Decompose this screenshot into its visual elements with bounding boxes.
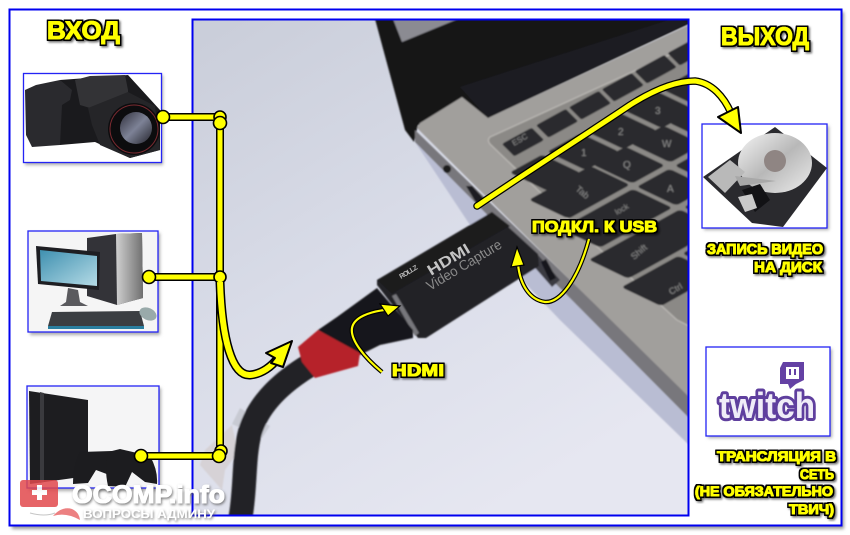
keyboard well — [488, 46, 689, 326]
icon: camera — [25, 75, 160, 158]
panel: hard drive — [702, 124, 829, 230]
function keys — [502, 41, 688, 156]
panel: camera — [24, 74, 163, 165]
watermark: OCOMP.info — [72, 481, 225, 509]
usb port — [530, 255, 560, 287]
red collar — [298, 330, 360, 378]
watermark — [20, 480, 225, 521]
caption: streaming: (НЕ ОБЯЗАТЕЛЬНО — [695, 483, 833, 499]
panel: computer — [28, 231, 160, 335]
heading: output: ВЫХОД — [721, 23, 809, 51]
hinge — [460, 19, 689, 118]
arrow: to capture cable — [220, 282, 292, 375]
screen display corner — [393, 19, 458, 42]
panel: central photo — [192, 18, 690, 516]
caption: record video to disk: ЗАПИСЬ ВИДЕО — [707, 241, 823, 258]
dongle text: HDMI — [424, 241, 473, 279]
icon: twitch bubble — [780, 362, 804, 389]
caption: streaming: СЕТЬ — [800, 466, 834, 482]
shadow under laptop — [415, 142, 689, 445]
label: hdmi: HDMI — [392, 361, 444, 380]
dongle text: Video Capture — [423, 236, 505, 294]
icon: gamepads — [73, 449, 157, 487]
icon: computer — [36, 233, 159, 329]
hdmi plug — [318, 288, 413, 355]
panel: game console — [27, 386, 161, 491]
caption: streaming: ТВИЧ) — [789, 501, 834, 517]
key labels: 2 — [618, 127, 624, 138]
laptop base top — [417, 25, 689, 397]
key labels: lock — [614, 201, 631, 217]
label: usb connection: ПОДКЛ. К USB — [532, 219, 657, 236]
icon: console — [29, 391, 88, 484]
heading: input: ВХОД — [47, 17, 120, 45]
cable — [240, 365, 310, 520]
laptop base side — [415, 130, 689, 418]
arrow: to hard drive — [477, 81, 741, 206]
keyboard keys — [511, 74, 688, 306]
capture dongle — [377, 212, 539, 338]
caption: streaming: ТРАНСЛЯЦИЯ В — [717, 448, 836, 464]
key labels: Tab — [574, 184, 591, 201]
tie — [200, 425, 238, 490]
arrow: usb — [511, 239, 589, 302]
icon: hdd — [703, 127, 827, 227]
key labels: 3 — [655, 106, 661, 117]
icon: first aid case — [20, 480, 80, 520]
key labels — [510, 106, 684, 297]
caption: record video to disk — [707, 241, 823, 276]
watermark: ВОПРОСЫ АДМИНУ — [83, 507, 216, 521]
key labels: Ctrl — [667, 281, 684, 297]
dongle text: ROLLZ — [398, 264, 420, 281]
key labels: Q — [623, 160, 631, 171]
caption: record video to disk: НА ДИСК — [754, 259, 823, 276]
key labels: ESC — [510, 132, 529, 148]
twitch wordmark: twitch — [719, 385, 815, 426]
key labels: A — [667, 184, 674, 195]
arrow: hdmi — [352, 304, 400, 372]
caption: streaming — [695, 448, 836, 517]
laptop screen — [375, 19, 689, 142]
tape band — [232, 408, 270, 438]
key labels: W — [662, 139, 672, 150]
panel: twitch logo — [706, 347, 832, 438]
connector: source lines — [134, 110, 227, 462]
key labels: Shift — [629, 242, 649, 262]
ports — [443, 165, 451, 173]
key labels: 1 — [581, 148, 587, 159]
